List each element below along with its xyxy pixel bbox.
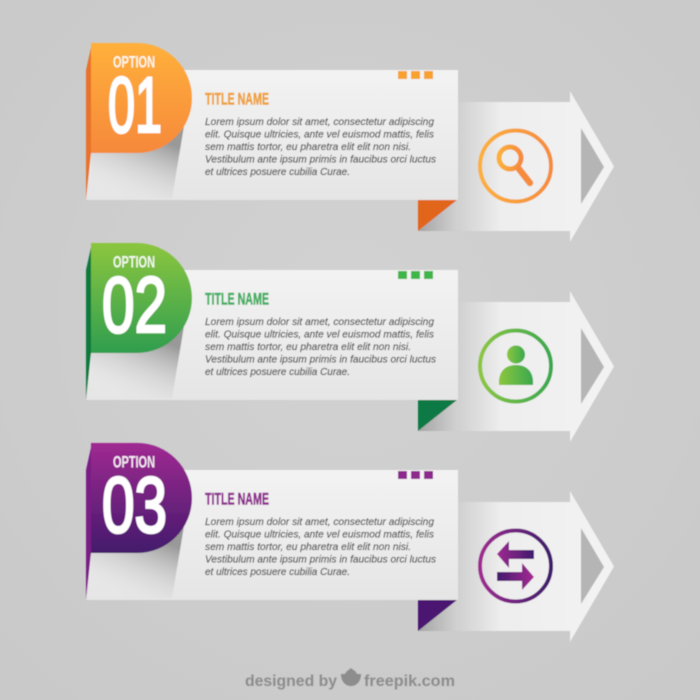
arrow 03 xyxy=(458,491,614,642)
panel: option 02 xyxy=(86,243,614,442)
body text 02: et ultrices posuere cubilia Curae. xyxy=(205,366,350,378)
arrow inner triangle 02 xyxy=(581,328,604,404)
head shadow 01 xyxy=(91,126,184,198)
squares 02 xyxy=(398,271,433,279)
fold shadow 01 xyxy=(418,200,458,231)
title 03: TITLE NAME xyxy=(205,490,269,508)
option label 02: OPTION xyxy=(113,254,155,272)
head shadow 02 xyxy=(91,326,184,398)
body text 02 xyxy=(205,316,437,378)
body text 03: elit. Quisque ultricies, ante vel euismod mattis, felis xyxy=(205,528,435,540)
body text 02: elit. Quisque ultricies, ante vel euismod mattis, felis xyxy=(205,328,435,340)
arrow inner triangle 03 xyxy=(581,528,604,604)
badge 03 xyxy=(91,443,192,553)
number 01: 01 xyxy=(108,60,162,149)
icon: swap arrows xyxy=(480,530,551,602)
arrow 02 xyxy=(458,291,614,442)
body text 02: sem mattis tortor, eu pharetra elit elit non nisi. xyxy=(205,341,411,353)
body text 03: sem mattis tortor, eu pharetra elit elit non nisi. xyxy=(205,541,411,553)
title 01: TITLE NAME xyxy=(205,90,269,108)
badge 01 xyxy=(91,43,192,153)
badge 02 xyxy=(91,243,192,353)
watermark: designed by xyxy=(245,673,337,690)
body text 01: elit. Quisque ultricies, ante vel euismod mattis, felis xyxy=(205,128,435,140)
body text 03 xyxy=(205,516,437,578)
option label 01: OPTION xyxy=(113,54,155,72)
head shadow 03 xyxy=(91,526,184,598)
fold shadow 03 xyxy=(418,600,458,631)
number 03: 03 xyxy=(102,460,167,549)
body text 03: et ultrices posuere cubilia Curae. xyxy=(205,566,350,578)
fold 02 xyxy=(418,400,457,431)
icon: user xyxy=(480,330,551,402)
spine 03 xyxy=(86,443,92,600)
body text 01 xyxy=(205,116,437,178)
option label 03: OPTION xyxy=(113,454,155,472)
watermark xyxy=(245,668,455,690)
body text 02: Vestibulum ante ipsum primis in faucibus orci luctus xyxy=(205,354,437,366)
body text 01: et ultrices posuere cubilia Curae. xyxy=(205,166,350,178)
panel: option 03 xyxy=(86,443,614,642)
title 02: TITLE NAME xyxy=(205,290,269,308)
fold shadow 02 xyxy=(418,400,458,431)
body text 02: Lorem ipsum dolor sit amet, consectetur adipiscing xyxy=(205,316,434,328)
body text 03: Vestibulum ante ipsum primis in faucibus orci luctus xyxy=(205,554,437,566)
body text 01: sem mattis tortor, eu pharetra elit elit non nisi. xyxy=(205,141,411,153)
card 03 xyxy=(86,470,458,600)
fold 03 xyxy=(418,600,457,631)
number 02: 02 xyxy=(102,260,167,349)
icon: freepik logo xyxy=(341,668,361,686)
arrow inner triangle 01 xyxy=(581,128,604,204)
body text 01: Lorem ipsum dolor sit amet, consectetur adipiscing xyxy=(205,116,434,128)
card 01 xyxy=(86,70,458,200)
squares 01 xyxy=(398,71,433,79)
watermark: freepik.com xyxy=(364,673,455,690)
fold 01 xyxy=(418,200,457,231)
arrow 01 xyxy=(458,91,614,242)
spine 02 xyxy=(86,243,92,400)
card 02 xyxy=(86,270,458,400)
body text 01: Vestibulum ante ipsum primis in faucibus orci luctus xyxy=(205,154,437,166)
spine 01 xyxy=(86,43,92,200)
icon: magnifier xyxy=(480,130,551,202)
squares 03 xyxy=(398,471,433,479)
panel: option 01 xyxy=(86,43,614,242)
body text 03: Lorem ipsum dolor sit amet, consectetur adipiscing xyxy=(205,516,434,528)
